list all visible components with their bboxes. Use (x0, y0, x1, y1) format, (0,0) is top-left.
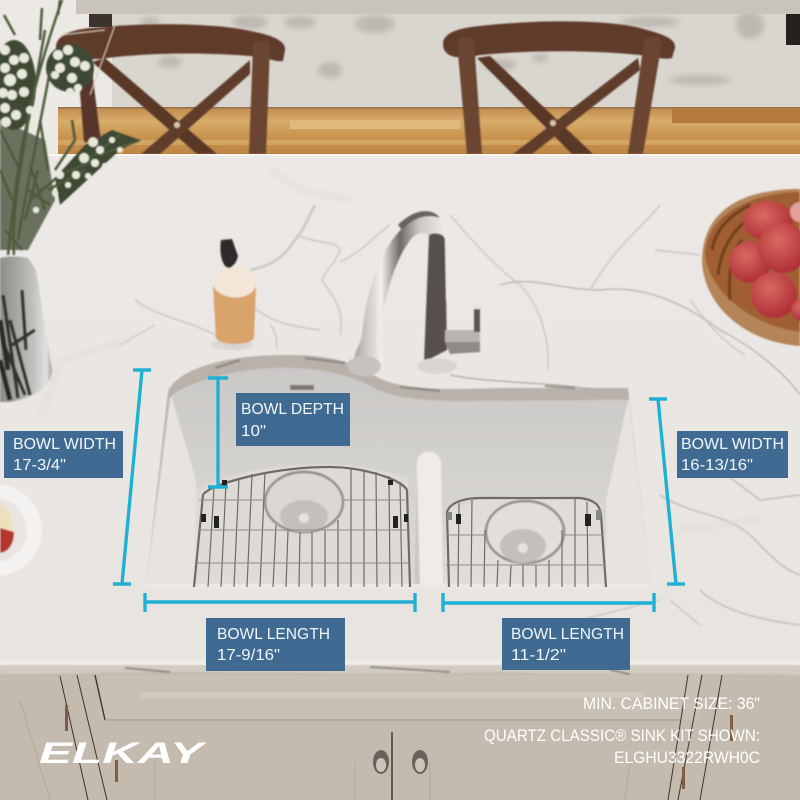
chair: right (443, 21, 675, 154)
basin side walls (147, 368, 650, 587)
label: right bowl length (502, 618, 630, 670)
rim (147, 355, 650, 587)
left drain (265, 472, 343, 532)
right wire rack (446, 498, 606, 587)
label: right bowl length: 11-1/2" (511, 647, 566, 664)
label: left bowl width: BOWL WIDTH (13, 436, 116, 453)
label: right bowl width: 16-13/16" (681, 457, 753, 474)
right drain (486, 501, 564, 563)
label: left bowl length: BOWL LENGTH (217, 626, 330, 643)
plate with apple slice (0, 484, 42, 576)
soap dispenser (210, 239, 256, 350)
dark foliage masses (0, 40, 140, 250)
marble veins (120, 205, 800, 625)
text: sink kit model: QUARTZ CLASSIC® SINK KIT SHOWN: (484, 726, 760, 745)
countertop (0, 154, 800, 666)
label: bowl depth: 10" (241, 423, 266, 440)
cabinet (0, 665, 800, 800)
label: right bowl width: BOWL WIDTH (681, 436, 784, 453)
label: bowl depth: BOWL DEPTH (241, 401, 344, 418)
label: bowl depth (236, 393, 350, 446)
plant and vase (0, 0, 140, 402)
dimension: right bowl width (649, 399, 685, 584)
rim veining (215, 358, 575, 391)
label: left bowl length (206, 618, 345, 671)
faucet (347, 211, 481, 376)
text: sink kit model (484, 726, 760, 767)
dimension: bowl depth (208, 378, 228, 487)
label: left bowl width: 17-3/4" (13, 457, 66, 474)
flowers (0, 45, 123, 213)
text: sink kit model: ELGHU3322RWH0C (614, 748, 760, 767)
marble edge strip (0, 661, 800, 675)
room background: rug and floor (0, 0, 800, 160)
cabinet knobs (373, 750, 428, 774)
bowl divider (414, 452, 443, 587)
label: left bowl width (4, 431, 123, 478)
label: left bowl length: 17-9/16" (217, 647, 280, 664)
dimension: right bowl length (443, 593, 654, 612)
stems and leaves (0, 0, 140, 255)
vase (0, 256, 52, 402)
basin back wall (172, 368, 628, 587)
logo: Elkay: ELKAY (39, 737, 208, 770)
label: right bowl length: BOWL LENGTH (511, 626, 624, 643)
dimension: left bowl length (145, 593, 415, 612)
text: minimum cabinet size: MIN. CABINET SIZE: 36" (583, 694, 760, 713)
fruit bowl (702, 189, 800, 346)
sink basin (147, 355, 650, 588)
left wire rack (194, 467, 410, 587)
label: right bowl width (677, 431, 788, 478)
dimension: left bowl width (113, 370, 151, 584)
chair: left (56, 24, 285, 154)
